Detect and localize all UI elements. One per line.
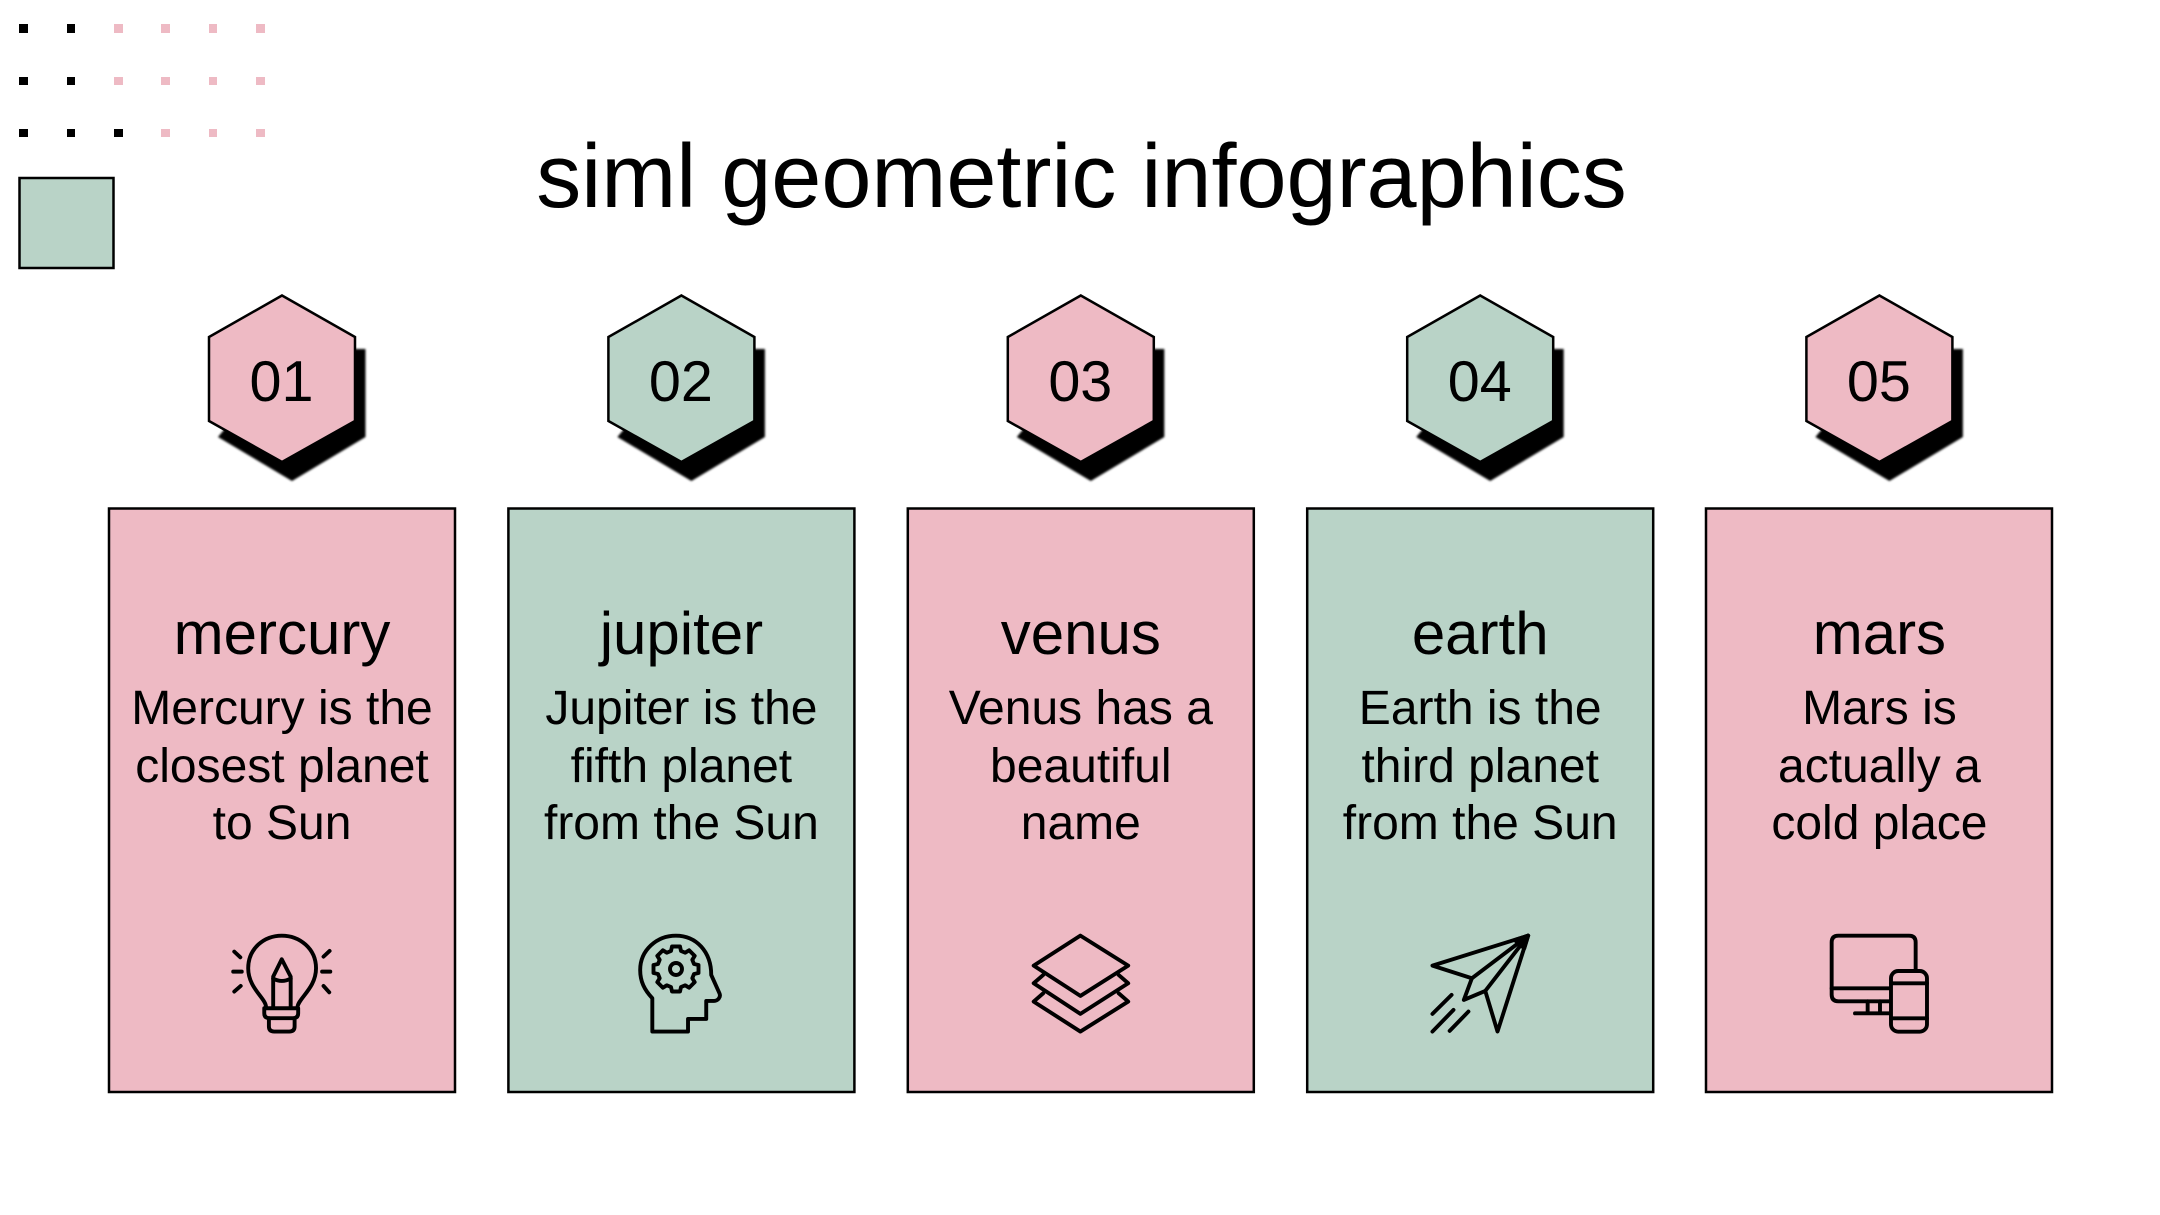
icon: monitor and phone	[1832, 936, 1927, 1032]
icon: paper plane	[1432, 936, 1528, 1032]
heading: jupiter: jupiter	[598, 600, 763, 667]
description: mercury: Mercury is the	[131, 682, 433, 735]
card: mars	[1706, 508, 2052, 1092]
column 4: earth	[1307, 296, 1653, 1092]
column 2: jupiter	[508, 296, 854, 1092]
description: jupiter: Jupiter is the	[545, 682, 817, 735]
column 3: venus	[908, 296, 1254, 1092]
hexagon badge 02: 02	[649, 350, 713, 414]
heading: mars: mars	[1813, 600, 1946, 667]
description: mercury: to Sun	[213, 797, 351, 850]
description: mars: Mars is	[1802, 682, 1957, 735]
description: mars: cold place	[1771, 797, 1987, 850]
description: venus: beautiful	[990, 740, 1172, 793]
card: jupiter	[508, 508, 854, 1092]
hexagon badge 04: 04	[1448, 350, 1512, 414]
column 1: mercury	[109, 296, 455, 1092]
hexagon badge 05	[1806, 296, 1963, 481]
column 5: mars	[1706, 296, 2052, 1092]
title: siml geometric infographics	[536, 127, 1627, 227]
description: venus: Venus has a	[949, 682, 1213, 735]
decorative green square	[20, 178, 114, 268]
hexagon badge 04	[1407, 296, 1564, 481]
description: jupiter: fifth planet	[571, 740, 792, 793]
card: venus	[908, 508, 1254, 1092]
description: earth: Earth is the	[1359, 682, 1602, 735]
description: earth: third planet	[1361, 740, 1599, 793]
description: venus: name	[1021, 797, 1141, 850]
heading: mercury: mercury	[174, 600, 390, 667]
icon: light bulb with pencil	[233, 936, 330, 1032]
description: jupiter: from the Sun	[544, 797, 819, 850]
hexagon badge 05: 05	[1847, 350, 1911, 414]
hexagon badge 01: 01	[250, 350, 313, 414]
icon: head with gear	[640, 936, 720, 1032]
hexagon badge 02	[608, 296, 765, 481]
decorative dot grid	[19, 24, 265, 137]
hexagon badge 01	[209, 296, 366, 481]
hexagon badge 03: 03	[1048, 350, 1112, 414]
description: mars: actually a	[1778, 740, 1981, 793]
heading: earth: earth	[1412, 600, 1549, 667]
card: earth	[1307, 508, 1653, 1092]
description: earth: from the Sun	[1343, 797, 1618, 850]
card: mercury	[109, 508, 455, 1092]
hexagon badge 03	[1008, 296, 1164, 481]
icon: stacked layers	[1034, 936, 1128, 1032]
description: mercury: closest planet	[135, 740, 429, 793]
heading: venus: venus	[1001, 600, 1161, 667]
